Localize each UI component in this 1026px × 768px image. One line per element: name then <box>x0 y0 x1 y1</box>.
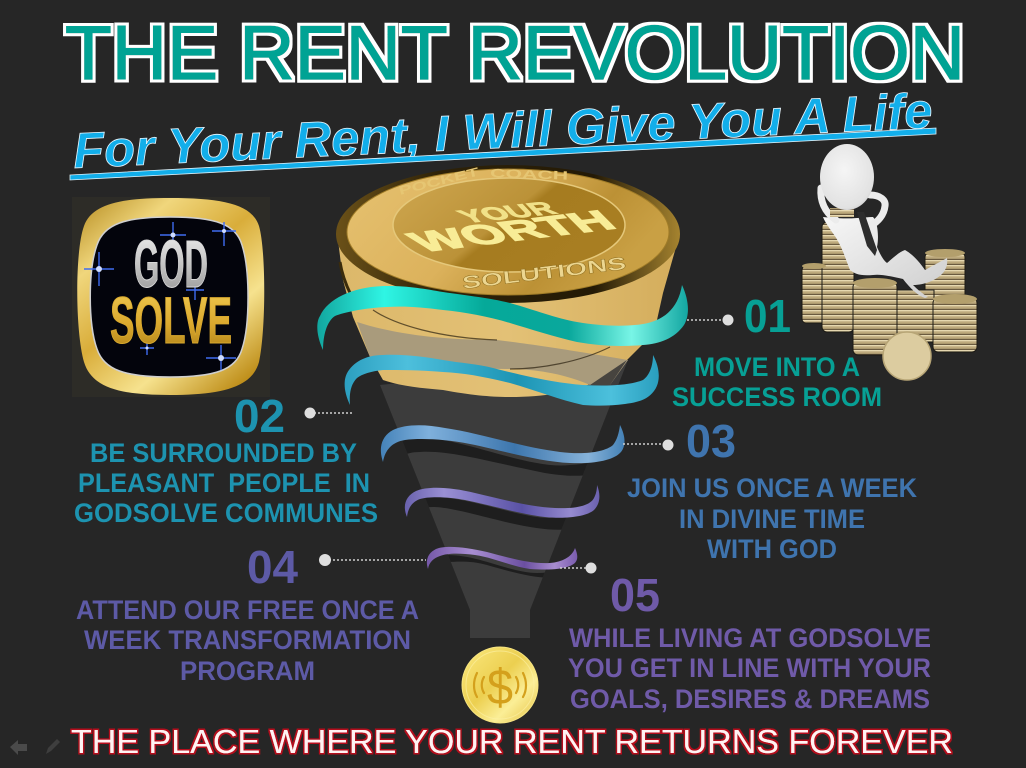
icon: slideshow pencil <box>46 739 60 754</box>
logo: God Solve badge <box>72 197 270 397</box>
step 02 number: 02 <box>234 390 285 442</box>
step 03 connector <box>623 440 674 450</box>
coin text: worth: WORTH <box>400 205 625 258</box>
step 04 text: WEEK TRANSFORMATION <box>84 625 411 655</box>
step 05 number: 05 <box>610 569 660 621</box>
coin text: coach: COACH <box>490 166 568 183</box>
step 05 text: WHILE LIVING AT GODSOLVE <box>569 623 931 653</box>
ribbon 2 blue-teal <box>345 355 659 406</box>
step 05 text <box>568 623 931 714</box>
step 05 text: YOU GET IN LINE WITH YOUR <box>568 653 931 683</box>
icon: relaxing figure on coin stacks <box>802 144 977 380</box>
step 04 text: PROGRAM <box>180 656 315 686</box>
step 04 text: ATTEND OUR FREE ONCE A <box>76 595 419 625</box>
figure body <box>823 217 947 298</box>
coin text: solutions: SOLUTIONS <box>461 253 627 293</box>
figure tie <box>857 212 877 256</box>
subtitle with underline: For Your Rent, I Will Give You A Life <box>72 83 934 179</box>
icon: dollar coin: $ <box>487 659 513 715</box>
step 01 connector <box>687 314 734 326</box>
title: THE RENT REVOLUTION <box>65 11 965 96</box>
step 02 connector <box>304 408 352 418</box>
step 04 connector <box>319 554 426 566</box>
icon: slideshow back arrow <box>10 740 27 755</box>
ribbon 4 purple-blue <box>405 485 599 518</box>
footer tagline: THE PLACE WHERE YOUR RENT RETURNS FOREVER <box>71 723 953 760</box>
logo text: SOLVE: SOLVE <box>110 283 232 357</box>
step 02 text <box>74 438 378 528</box>
front coin <box>883 332 931 380</box>
step 05 connector <box>560 562 596 574</box>
step 03 text: IN DIVINE TIME <box>679 504 865 534</box>
figure head <box>820 144 874 210</box>
logo: God Solve badge: GOD <box>134 227 208 302</box>
step 03 text: WITH GOD <box>707 534 837 564</box>
coin stacks <box>802 222 977 355</box>
step 03 text: JOIN US ONCE A WEEK <box>627 473 917 503</box>
step 01 text: SUCCESS ROOM <box>672 382 882 412</box>
step 04 number: 04 <box>247 541 298 593</box>
coin text: pocket: POCKET <box>397 164 481 198</box>
step 01 text: MOVE INTO A <box>694 352 860 382</box>
neck coins <box>830 208 854 217</box>
step 02 text: BE SURROUNDED BY <box>90 438 357 468</box>
icon: dollar coin <box>462 647 538 723</box>
step 05 text: GOALS, DESIRES & DREAMS <box>570 684 930 714</box>
coin text: your: YOUR <box>452 197 563 227</box>
step 04 text <box>76 595 419 686</box>
ribbon 1 teal <box>317 285 688 350</box>
step 03 text <box>627 473 917 564</box>
step 03 number: 03 <box>686 415 736 467</box>
figure arms <box>821 188 885 226</box>
step 02 text: GODSOLVE COMMUNES <box>74 498 378 528</box>
ribbon 5 purple <box>427 547 577 570</box>
step 01 text <box>672 352 882 412</box>
step 02 text: PLEASANT PEOPLE IN <box>78 468 370 498</box>
gold coin stack: Your Worth Solutions <box>336 164 680 397</box>
ribbon 3 blue <box>381 425 624 463</box>
step 01 number: 01 <box>744 290 791 342</box>
funnel <box>380 360 628 638</box>
